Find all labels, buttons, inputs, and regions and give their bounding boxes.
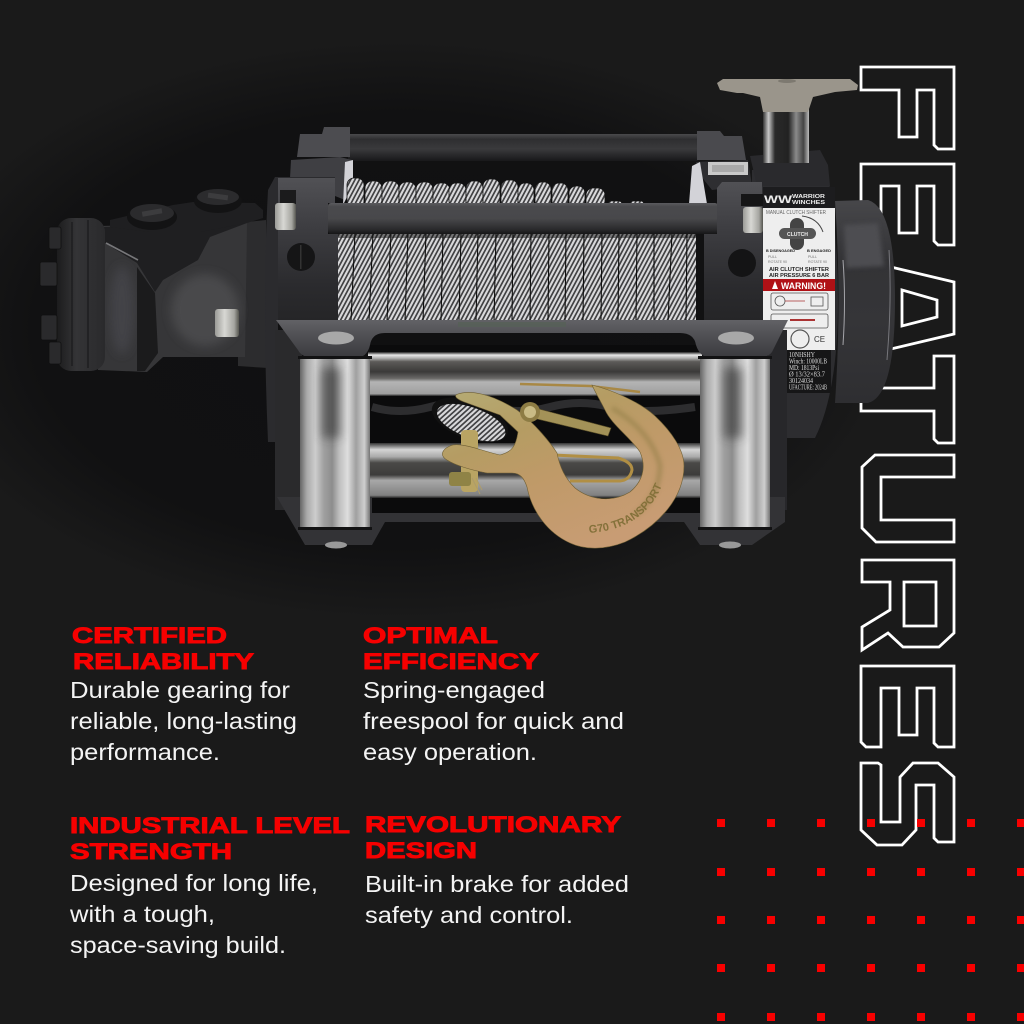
body text: reliable, long-lasting [70,708,297,734]
right main bracket [704,182,763,320]
warning band: WARNING! [781,281,826,292]
clutch dial: CLUTCH [787,232,808,238]
body text: Spring-engaged [363,677,545,703]
label engage text: B DISENGAGED [766,248,795,253]
left main bracket [265,177,338,442]
heading: OPTIMAL [363,623,498,648]
drum flange slivers [343,160,707,205]
bottom horizontal roller [370,443,700,498]
label engage text: B ENGAGED [807,248,831,253]
body text: freespool for quick and [363,708,624,734]
heading: CERTIFIED [72,623,227,648]
body text: Designed for long life, [70,870,318,896]
silver right bolt [743,207,763,233]
front tie bar [328,203,718,234]
title: FEATURES vertical outlined lettering [861,67,954,845]
body text: performance. [70,739,220,765]
body text [69,870,318,958]
hydraulic motor [40,189,268,372]
spec plate text: 10NHSHY [789,350,815,359]
end cap bolts [40,227,61,364]
right drum motor cover [835,200,895,403]
air clutch text: AIR PRESSURE 6 BAR [769,273,829,279]
top horizontal roller [368,352,702,396]
body text: space-saving build. [70,932,286,958]
left vertical roller [298,356,372,530]
hook stamped text: G70 TRANSPORT [589,482,661,533]
winch illustration [40,79,895,548]
label logo: WINCHES [792,200,826,206]
body text [70,677,297,765]
right knob [728,249,756,277]
label heading: MANUAL CLUTCH SHIFTER [766,210,826,216]
product label [763,187,835,393]
heading: INDUSTRIAL LEVEL [70,813,350,838]
plate bolts [318,332,754,548]
warning pictograms [771,293,828,348]
body text: easy operation. [363,739,537,765]
body text [365,871,629,928]
body text: safety and control. [365,902,573,928]
air clutch text: AIR CLUTCH SHIFTER [769,267,829,273]
feature: Industrial Level Strength [69,813,350,958]
cable thimble in eye [426,388,514,452]
label logo: WW [764,194,793,206]
rear tie bar [348,134,698,161]
label engage text [766,248,831,264]
silver bracket bolt [275,203,296,230]
body text: with a tough, [69,901,215,927]
safety latch [520,402,611,436]
spec plate text: MD: 1813Psi [789,363,819,372]
T-handle shifter [717,79,858,186]
label engage text: PULL [808,255,817,259]
label engage text: PULL [768,255,777,259]
label logo [764,194,826,206]
clutch dial [779,216,823,250]
right rear bracket [696,131,752,190]
heading [363,623,539,674]
port cap left [127,204,177,230]
hook shading [612,408,660,515]
heading [365,812,621,863]
air clutch text [769,267,829,279]
feature: Revolutionary Design [365,812,629,928]
heading: RELIABILITY [73,649,254,674]
fairlead frame [275,320,788,548]
label engage text: ROTATE 90 [808,260,827,264]
clevis pin [449,430,482,494]
spec plate text: Ø 13/32×83.7 [789,370,825,378]
spec plate text [789,350,827,392]
heading: DESIGN [365,838,477,863]
rear cable coils [347,178,644,208]
bottom frame plate [277,497,785,545]
hook body [442,385,684,548]
heading [70,813,350,864]
red dot grid [717,819,1024,1021]
right housing [752,165,838,438]
port cap right [194,189,242,213]
right vertical roller [698,356,772,530]
left knob [287,243,315,271]
heading: EFFICIENCY [363,649,539,674]
feature: Optimal Efficiency [363,623,624,765]
spec plate text: Winch: 10000LB [789,356,827,366]
body text: Built-in brake for added [365,871,629,897]
gold wire latch behind hook [553,455,632,481]
top frame plate [276,320,788,358]
cable behind hook [372,403,695,411]
body text [363,677,624,765]
heading: STRENGTH [70,839,232,864]
warning band [763,279,835,292]
label engage text: ROTATE 90 [768,260,787,264]
motor end cap [57,218,105,371]
silver motor bolt [215,309,239,337]
body text: Durable gearing for [70,677,290,703]
left rear bracket [290,127,352,200]
heading [72,623,254,674]
spec plate text: 30124034 [789,376,813,385]
heading: REVOLUTIONARY [365,812,621,837]
label logo: WARRIOR [792,194,826,200]
main cable drum [338,233,696,321]
horizontal roller backing [370,345,702,515]
feature: Certified Reliability [70,623,297,765]
CE mark: CE [814,335,825,344]
spec plate text: UFACTURE: 2024B [789,382,827,392]
hook assembly [432,382,684,548]
